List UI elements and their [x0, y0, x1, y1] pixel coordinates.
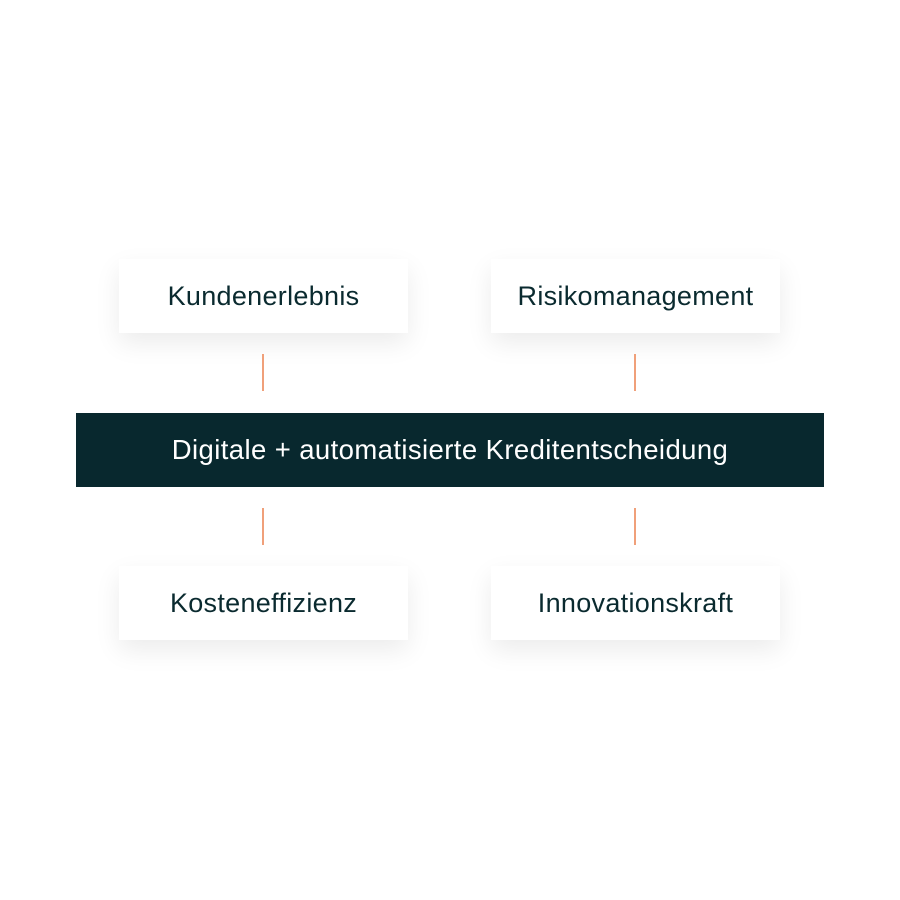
box: Innovationskraft — [491, 566, 780, 640]
box: Innovationskraft: Innovationskraft — [538, 588, 733, 618]
arrow: down right — [634, 508, 636, 545]
arrow: up right — [634, 354, 636, 391]
box: Kundenerlebnis: Kundenerlebnis — [168, 280, 359, 310]
central bar: Digitale + automatisierte Kreditentscheidung — [172, 434, 728, 465]
arrow: down left — [262, 508, 264, 545]
box: Kosteneffizienz — [119, 566, 408, 640]
box: Kosteneffizienz: Kosteneffizienz — [170, 588, 357, 618]
box: Risikomanagement — [491, 259, 780, 333]
box: Risikomanagement: Risikomanagement — [518, 280, 753, 310]
arrow: up left — [262, 354, 264, 391]
box: Kundenerlebnis — [119, 259, 408, 333]
central bar — [76, 413, 824, 487]
